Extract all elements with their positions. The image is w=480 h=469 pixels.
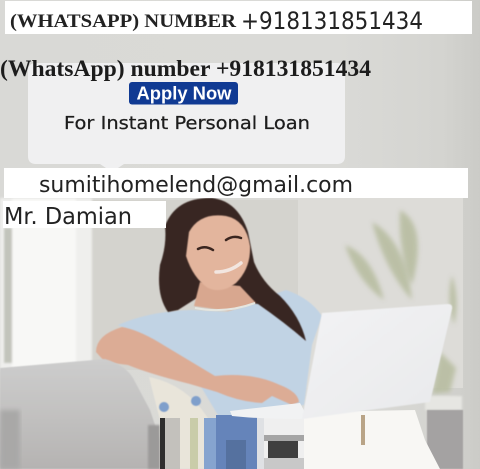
hair — [159, 198, 306, 341]
sweater collar — [195, 303, 255, 310]
whatsapp number bar: +918131851434 — [241, 7, 423, 35]
whatsapp number bar — [5, 1, 472, 35]
bubble caption: For Instant Personal Loan — [64, 114, 310, 134]
eyes and smile — [198, 237, 241, 272]
whatsapp number bar: (WHATSAPP) NUMBER — [10, 11, 236, 32]
laptop — [230, 304, 452, 419]
glitched lower stripes — [216, 396, 463, 469]
whatsapp number heading: (WhatsApp) number +918131851434 — [0, 56, 372, 81]
speech bubble — [28, 63, 345, 168]
floral cushion — [149, 377, 218, 469]
contact name bar: Mr. Damian — [4, 204, 132, 230]
face — [186, 215, 250, 290]
sofa arm — [0, 359, 160, 469]
email bar — [4, 168, 468, 198]
background plant — [345, 210, 457, 394]
woman — [96, 198, 322, 422]
window curtain — [0, 198, 92, 370]
apply now button: Apply Now — [136, 82, 232, 104]
blue sweater — [118, 290, 322, 422]
email bar: sumitihomelend@gmail.com — [39, 173, 353, 198]
arm and hand — [96, 327, 299, 405]
neck — [194, 282, 256, 311]
